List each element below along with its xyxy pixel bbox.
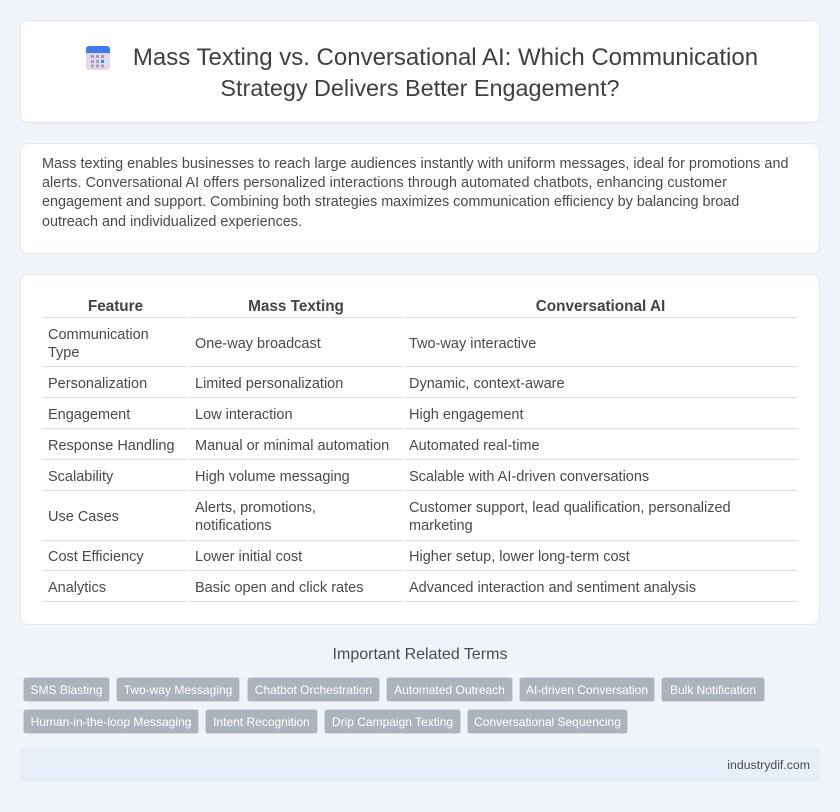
panel: header — [20, 20, 820, 123]
row: use cases: marketing — [409, 518, 473, 534]
row: cost efficiency: Cost Efficiency — [48, 549, 144, 565]
row: personalization: Dynamic, context-aware — [409, 376, 565, 392]
row: communication type: Type — [48, 345, 79, 361]
text block: summary: engagement and support. Combining both strategies maximizes communication efficiency by balancing broad — [42, 194, 739, 210]
row: engagement — [48, 407, 524, 423]
text block: summary: alerts. Conversational AI offers personalized interactions through automated chatbots, enhancing customer — [42, 175, 727, 191]
related term tags: Chatbot Orchestration — [255, 683, 372, 697]
row: personalization: Limited personalization — [195, 376, 343, 392]
row: use cases: Customer support, lead qualification, personalized — [409, 500, 731, 516]
row: communication type: Communication — [48, 327, 149, 343]
row: scalability: High volume messaging — [195, 469, 350, 485]
row: cost efficiency: Higher setup, lower long-term cost — [409, 549, 630, 565]
row: analytics — [48, 580, 696, 596]
related term tags: Two-way Messaging — [124, 683, 232, 697]
related term tags: SMS Blasting — [30, 683, 103, 697]
related term tags: Automated Outreach — [394, 683, 505, 697]
row: engagement: Engagement — [48, 407, 130, 423]
row: scalability: Scalability — [48, 469, 113, 485]
row: communication type — [48, 327, 536, 361]
row: analytics: Advanced interaction and sentiment analysis — [409, 580, 696, 596]
title: Mass Texting vs. Conversational AI: Which Communication — [133, 44, 758, 71]
related term tags: AI-driven Conversation — [526, 683, 648, 697]
row: use cases — [48, 500, 731, 534]
text block: summary: Mass texting enables businesses to reach large audiences instantly with uniform messages, ideal for promotions and — [42, 156, 789, 172]
row: communication type: Two-way interactive — [409, 336, 536, 352]
row: response handling: Response Handling — [48, 438, 175, 454]
row: personalization: Personalization — [48, 376, 147, 392]
icon: calendar grid — [86, 46, 110, 70]
row: cost efficiency: Lower initial cost — [195, 549, 302, 565]
row: communication type: One-way broadcast — [195, 336, 321, 352]
footer: source: industrydif.com — [727, 758, 810, 772]
row: cost efficiency — [48, 549, 630, 565]
title: Strategy Delivers Better Engagement? — [220, 75, 620, 101]
heading: related terms: Important Related Terms — [333, 646, 507, 663]
text block: summary — [42, 156, 789, 230]
panel: comparison table — [20, 274, 820, 625]
row: engagement: High engagement — [409, 407, 523, 423]
row: analytics: Analytics — [48, 580, 106, 596]
row: response handling: Automated real-time — [409, 438, 540, 454]
table header — [88, 298, 665, 315]
row: scalability — [48, 469, 649, 485]
row: personalization — [48, 376, 565, 392]
row: use cases: Alerts, promotions, — [195, 500, 316, 516]
table header: Mass Texting — [248, 298, 344, 315]
row: engagement: Low interaction — [195, 407, 293, 423]
row: response handling: Manual or minimal automation — [195, 438, 389, 454]
row: use cases: notifications — [195, 518, 272, 534]
panel: description — [20, 143, 820, 254]
related term tags: Conversational Sequencing — [474, 715, 621, 729]
row: analytics: Basic open and click rates — [195, 580, 363, 596]
row: use cases: Use Cases — [48, 509, 119, 525]
related term tags — [23, 677, 765, 734]
related term tags: Drip Campaign Texting — [332, 715, 453, 729]
row: response handling — [48, 438, 540, 454]
related term tags: Intent Recognition — [213, 715, 310, 729]
related term tags: Human-in-the-loop Messaging — [31, 715, 191, 729]
text block: summary: outreach and individualized experiences. — [42, 214, 302, 230]
table header: Conversational AI — [536, 298, 665, 315]
footer bar — [20, 748, 820, 782]
row: scalability: Scalable with AI-driven conversations — [409, 469, 649, 485]
table header: Feature — [88, 298, 143, 315]
related term tags: Bulk Notification — [670, 683, 756, 697]
title — [133, 44, 758, 101]
